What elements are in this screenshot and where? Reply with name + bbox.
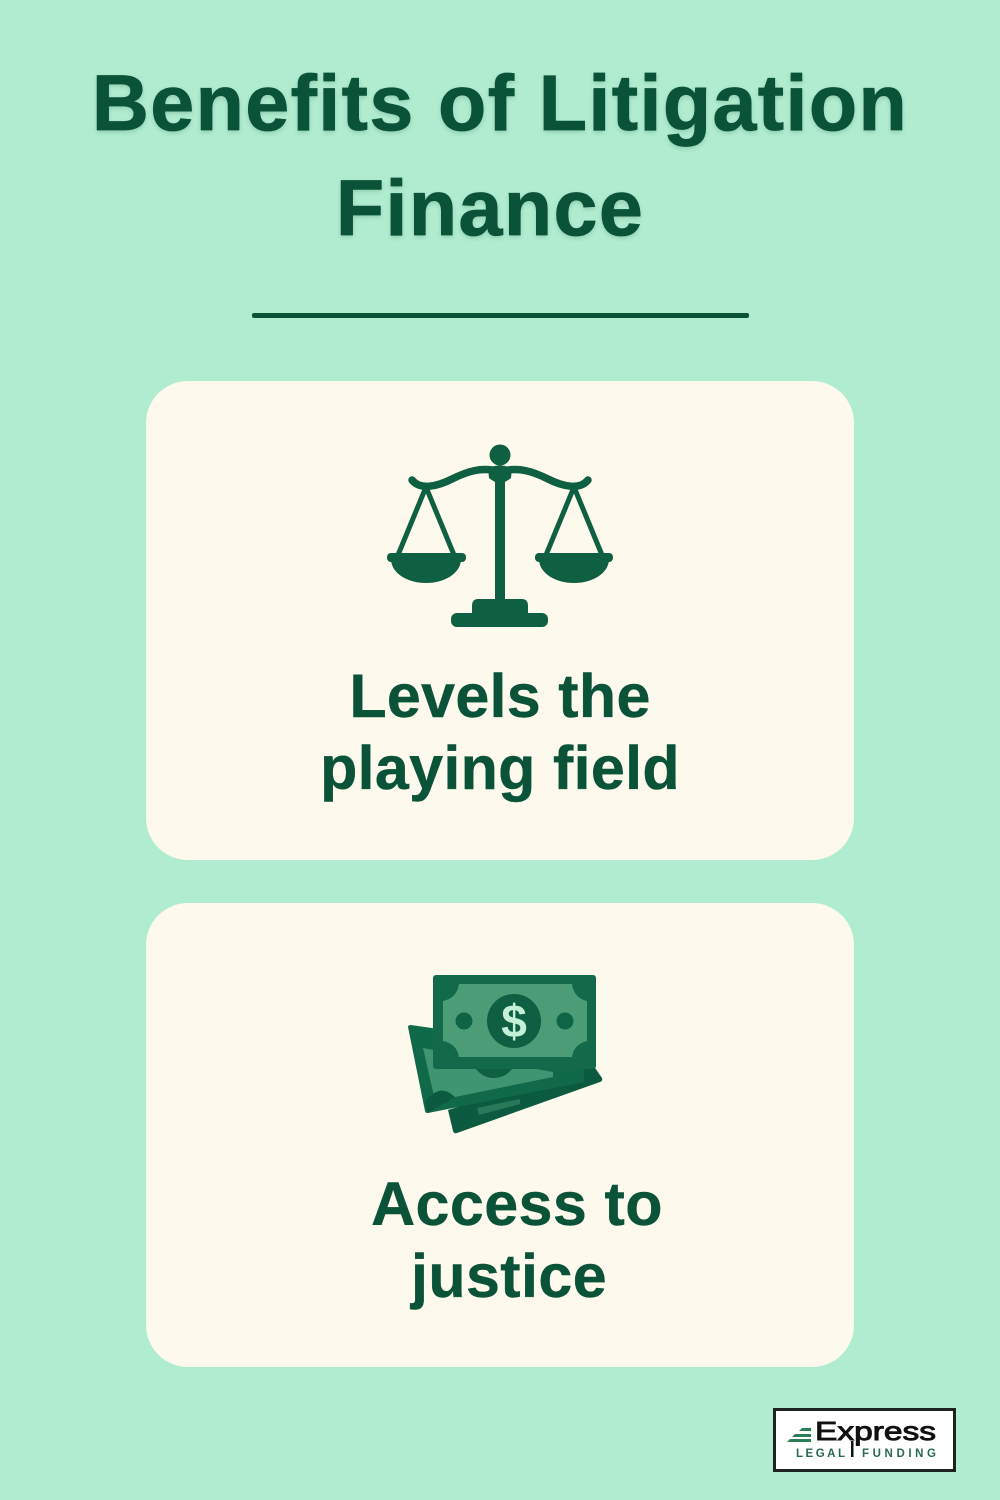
icon: stack of money: $ bbox=[501, 995, 527, 1047]
logo: Express Legal Funding bbox=[773, 1408, 956, 1472]
logo artwork: FUNDING bbox=[862, 1448, 936, 1460]
logo artwork: LEGAL bbox=[796, 1448, 845, 1460]
title divider bbox=[252, 313, 749, 318]
title bbox=[92, 58, 908, 252]
label: levels the playing field: Levels the bbox=[349, 662, 651, 730]
logo artwork: Express bbox=[815, 1416, 936, 1446]
title: Finance bbox=[336, 163, 644, 252]
title: Benefits of Litigation bbox=[92, 58, 908, 147]
label: levels the playing field bbox=[320, 662, 680, 802]
label: access to justice bbox=[371, 1170, 663, 1310]
panel: levels the playing field bbox=[146, 381, 854, 860]
logo artwork bbox=[787, 1416, 936, 1460]
panel: access to justice bbox=[146, 903, 854, 1367]
label: access to justice: justice bbox=[411, 1242, 607, 1310]
label: access to justice: Access to bbox=[371, 1170, 663, 1238]
icon: balance scale bbox=[387, 444, 613, 627]
icon: stack of money bbox=[408, 975, 602, 1134]
label: levels the playing field: playing field bbox=[320, 734, 680, 802]
